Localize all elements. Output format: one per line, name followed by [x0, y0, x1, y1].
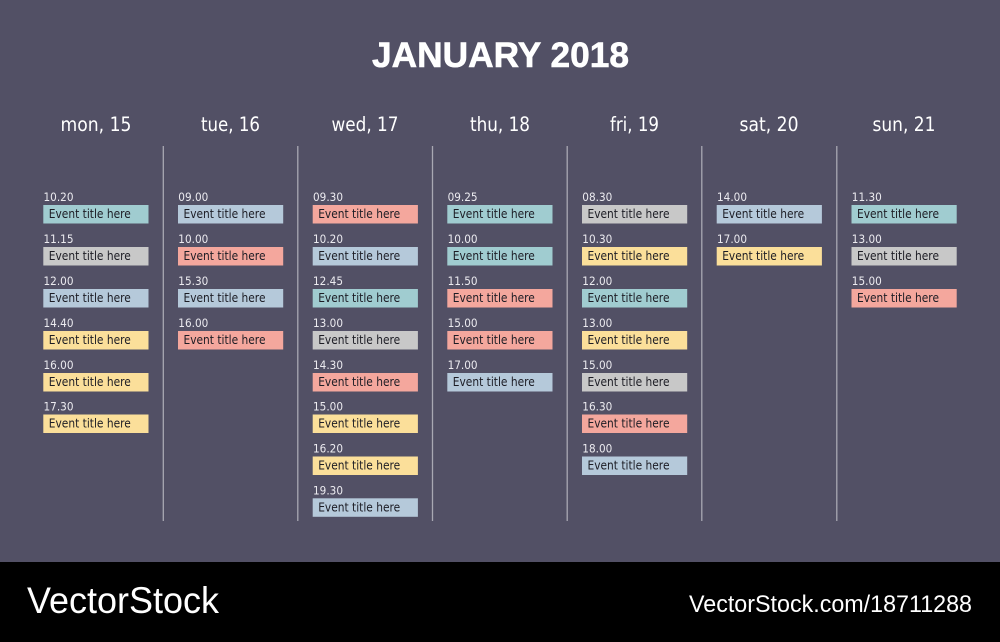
- event 11.30: Event title here: [857, 207, 939, 221]
- event 16.00: Event title here: [49, 375, 131, 389]
- event 16.00: [178, 316, 283, 350]
- event 10.00: Event title here: [453, 249, 535, 263]
- event 10.20: Event title here: [49, 207, 131, 221]
- event 15.00: 15.00: [852, 274, 882, 288]
- event 13.00: [852, 232, 957, 266]
- event 10.30: [582, 232, 687, 266]
- event 15.30: [178, 274, 283, 308]
- event 10.20: Event title here: [318, 249, 400, 263]
- event 12.00: Event title here: [588, 291, 670, 305]
- event 16.20: 16.20: [313, 441, 343, 455]
- event 15.00: [582, 358, 687, 392]
- event 11.15: Event title here: [49, 249, 131, 263]
- event 19.30: 19.30: [313, 483, 343, 497]
- event 15.00: Event title here: [588, 375, 670, 389]
- event 14.30: [313, 358, 418, 392]
- day heading: sun, 21: [872, 113, 936, 136]
- event 16.20: Event title here: [318, 458, 400, 472]
- event 09.00: 09.00: [178, 190, 208, 204]
- event 15.30: 15.30: [178, 274, 208, 288]
- event 17.00: 17.00: [448, 358, 478, 372]
- event 16.30: 16.30: [582, 399, 612, 413]
- event 17.30: 17.30: [44, 399, 74, 413]
- event 11.15: 11.15: [44, 232, 74, 246]
- footer bar: [0, 562, 1000, 642]
- event 17.00: Event title here: [722, 249, 804, 263]
- column: sun, 21: [852, 113, 957, 308]
- title: JANUARY 2018: [372, 36, 629, 75]
- event 16.00: 16.00: [178, 316, 208, 330]
- event 11.30: 11.30: [852, 190, 882, 204]
- event 15.00: [313, 399, 418, 433]
- event 13.00: [313, 316, 418, 350]
- footer logo: VectorStock: [27, 580, 219, 621]
- event 10.00: [178, 232, 283, 266]
- event 11.50: [447, 274, 552, 308]
- footer image id: VectorStock.com/18711288: [689, 591, 972, 618]
- event 10.20: [313, 232, 418, 266]
- event 11.50: Event title here: [453, 291, 535, 305]
- event 14.30: Event title here: [318, 375, 400, 389]
- event 09.25: Event title here: [453, 207, 535, 221]
- event 11.50: 11.50: [448, 274, 478, 288]
- day heading: mon, 15: [60, 113, 132, 136]
- event 08.30: [582, 190, 687, 224]
- column: wed, 17: [313, 113, 418, 517]
- event 09.00: [178, 190, 283, 224]
- column: tue, 16: [178, 113, 283, 350]
- event 13.00: 13.00: [852, 232, 882, 246]
- event 18.00: [582, 441, 687, 475]
- event 12.00: Event title here: [49, 291, 131, 305]
- day heading: sat, 20: [740, 113, 798, 136]
- event 14.00: Event title here: [722, 207, 804, 221]
- event 12.00: 12.00: [582, 274, 612, 288]
- event 09.30: 09.30: [313, 190, 343, 204]
- event 15.00: Event title here: [857, 291, 939, 305]
- event 16.30: Event title here: [588, 416, 670, 430]
- event 12.45: Event title here: [318, 291, 400, 305]
- event 12.45: [313, 274, 418, 308]
- event 10.20: 10.20: [313, 232, 343, 246]
- event 18.00: 18.00: [582, 441, 612, 455]
- column: fri, 19: [582, 113, 687, 475]
- event 13.00: Event title here: [857, 249, 939, 263]
- event 14.40: Event title here: [49, 333, 131, 347]
- day heading: wed, 17: [332, 113, 398, 136]
- event 12.00: 12.00: [44, 274, 74, 288]
- day heading: tue, 16: [201, 113, 260, 136]
- event 13.00: Event title here: [318, 333, 400, 347]
- event 10.20: [43, 190, 148, 224]
- event 18.00: Event title here: [588, 458, 670, 472]
- event 13.00: 13.00: [313, 316, 343, 330]
- event 12.00: [582, 274, 687, 308]
- event 11.15: [43, 232, 148, 266]
- event 08.30: 08.30: [582, 190, 612, 204]
- event 10.30: 10.30: [582, 232, 612, 246]
- event 17.00: [717, 232, 822, 266]
- event 10.20: 10.20: [44, 190, 74, 204]
- event 09.25: [447, 190, 552, 224]
- event 15.00: [447, 316, 552, 350]
- event 09.30: [313, 190, 418, 224]
- event 16.00: [43, 358, 148, 392]
- event 10.00: [447, 232, 552, 266]
- column: thu, 18: [447, 113, 552, 392]
- event 10.00: Event title here: [184, 249, 266, 263]
- column: sat, 20: [717, 113, 822, 266]
- event 17.00: [447, 358, 552, 392]
- event 19.30: [313, 483, 418, 517]
- event 14.40: 14.40: [44, 316, 74, 330]
- event 16.20: [313, 441, 418, 475]
- event 13.00: [582, 316, 687, 350]
- event 15.00: 15.00: [582, 358, 612, 372]
- event 16.00: Event title here: [184, 333, 266, 347]
- event 13.00: Event title here: [588, 333, 670, 347]
- event 15.00: 15.00: [313, 399, 343, 413]
- event 12.45: 12.45: [313, 274, 343, 288]
- event 09.30: Event title here: [318, 207, 400, 221]
- event 17.30: [43, 399, 148, 433]
- event 15.00: 15.00: [448, 316, 478, 330]
- event 14.00: [717, 190, 822, 224]
- column: mon, 15: [43, 113, 148, 433]
- event 10.00: 10.00: [178, 232, 208, 246]
- event 15.00: Event title here: [453, 333, 535, 347]
- event 12.00: [43, 274, 148, 308]
- event 16.00: 16.00: [44, 358, 74, 372]
- event 10.00: 10.00: [448, 232, 478, 246]
- event 09.25: 09.25: [448, 190, 478, 204]
- event 08.30: Event title here: [588, 207, 670, 221]
- event 15.30: Event title here: [184, 291, 266, 305]
- event 16.30: [582, 399, 687, 433]
- event 14.30: 14.30: [313, 358, 343, 372]
- event 15.00: [852, 274, 957, 308]
- event 09.00: Event title here: [184, 207, 266, 221]
- event 11.30: [852, 190, 957, 224]
- event 15.00: Event title here: [318, 416, 400, 430]
- event 14.00: 14.00: [717, 190, 747, 204]
- day heading: fri, 19: [610, 113, 659, 136]
- event 10.30: Event title here: [588, 249, 670, 263]
- event 19.30: Event title here: [318, 500, 400, 514]
- event 17.00: Event title here: [453, 375, 535, 389]
- event 17.30: Event title here: [49, 416, 131, 430]
- event 13.00: 13.00: [582, 316, 612, 330]
- event 14.40: [43, 316, 148, 350]
- day heading: thu, 18: [470, 113, 530, 136]
- event 17.00: 17.00: [717, 232, 747, 246]
